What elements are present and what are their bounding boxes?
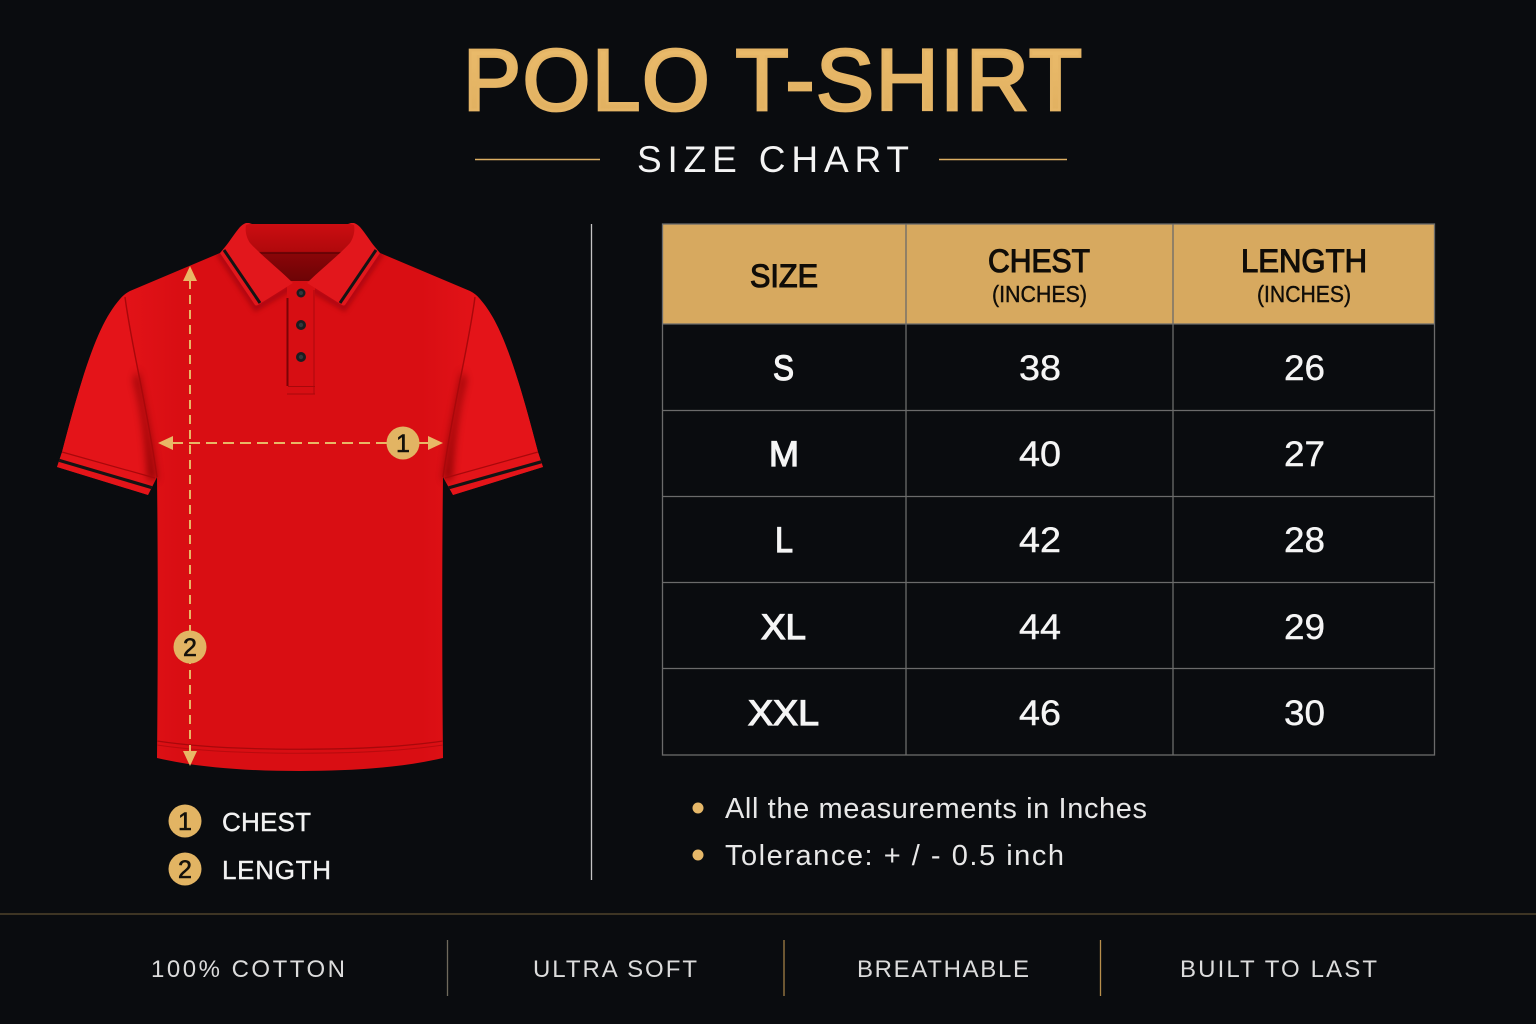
table header: (INCHES) xyxy=(992,281,1087,307)
badge 2 on shirt xyxy=(174,630,206,664)
legend item: chest: 1 xyxy=(178,808,192,836)
footer separators xyxy=(448,940,1100,996)
table header: CHEST xyxy=(988,243,1090,279)
row S: 26 xyxy=(1284,349,1325,388)
right collar flap xyxy=(307,223,380,306)
badge 2 on shirt: 2 xyxy=(183,634,197,662)
table grid xyxy=(662,224,1434,755)
row L: L xyxy=(775,521,793,560)
row M: 27 xyxy=(1284,435,1325,474)
legend item: chest: CHEST xyxy=(222,807,311,837)
row S: S xyxy=(773,349,794,388)
row XXL: 46 xyxy=(1019,694,1061,733)
footer features xyxy=(151,956,1377,983)
size table xyxy=(662,224,1434,755)
polo shirt illustration xyxy=(57,223,544,771)
row S: 38 xyxy=(1019,349,1061,388)
table header: SIZE xyxy=(750,258,818,294)
table header: (INCHES) xyxy=(1257,281,1351,307)
badge 1 on shirt xyxy=(386,426,420,460)
vertical divider xyxy=(590,224,592,880)
left collar flap xyxy=(220,223,293,306)
measurement notes xyxy=(692,793,1147,872)
row XL: 44 xyxy=(1019,608,1061,647)
neck stitch line xyxy=(258,252,342,254)
row XXL xyxy=(748,694,1325,733)
table header: LENGTH xyxy=(1241,243,1367,279)
right cuff xyxy=(445,452,544,488)
shirt silhouette xyxy=(57,253,543,771)
badge 1 on shirt: 1 xyxy=(396,430,410,458)
buttons xyxy=(296,288,306,362)
footer rule xyxy=(0,913,1536,915)
legend item: length: 2 xyxy=(178,856,192,884)
row M: M xyxy=(769,435,799,474)
legend item: length: LENGTH xyxy=(222,855,331,885)
length measurement arrow xyxy=(183,266,197,766)
row XL: 29 xyxy=(1284,608,1325,647)
row M: 40 xyxy=(1019,435,1061,474)
row M xyxy=(769,435,1325,474)
feature: built to last: BUILT TO LAST xyxy=(1180,956,1377,983)
chest measurement arrow xyxy=(158,436,443,450)
feature: cotton: 100% COTTON xyxy=(151,956,345,983)
row L: 28 xyxy=(1284,521,1325,560)
left cuff xyxy=(58,452,155,488)
row XL: XL xyxy=(761,608,806,647)
shirt shading xyxy=(57,252,544,753)
row S xyxy=(773,349,1325,388)
table header xyxy=(662,224,1434,324)
feature: ultra soft: ULTRA SOFT xyxy=(533,956,697,983)
row XL xyxy=(761,608,1325,647)
measurement notes: Tolerance: + / - 0.5 inch xyxy=(725,840,1064,872)
neck opening xyxy=(238,224,362,284)
row L: 42 xyxy=(1019,521,1061,560)
title: POLO T-SHIRT xyxy=(463,32,1082,129)
legend item: length xyxy=(168,852,331,886)
row XXL: 30 xyxy=(1284,694,1325,733)
placket xyxy=(287,281,315,394)
measurement notes: All the measurements in Inches xyxy=(725,793,1147,825)
feature: breathable: BREATHABLE xyxy=(857,956,1029,983)
legend xyxy=(168,804,331,886)
row L xyxy=(775,521,1325,560)
legend item: chest xyxy=(168,804,311,838)
subtitle: size chart: SIZE CHART xyxy=(637,139,909,180)
row XXL: XXL xyxy=(748,694,819,733)
